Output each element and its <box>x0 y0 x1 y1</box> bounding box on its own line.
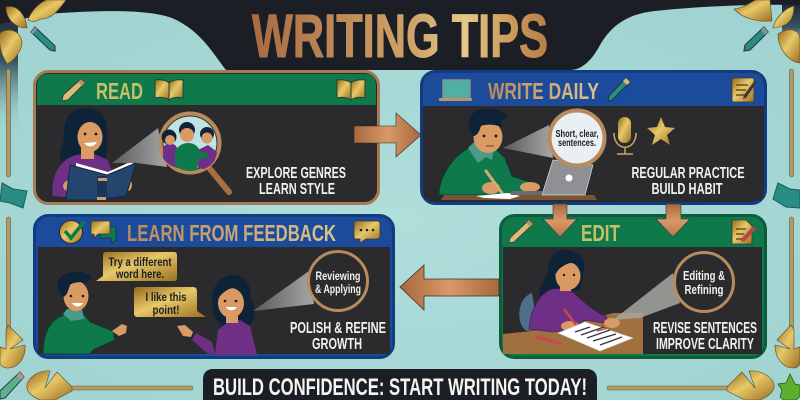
write daily heading: WRITE DAILY <box>488 78 599 104</box>
icon: green star <box>778 374 800 400</box>
woman reading <box>52 108 136 200</box>
read header <box>37 74 376 105</box>
dark corner shading left <box>0 0 18 135</box>
edit heading: EDIT <box>581 220 620 246</box>
write daily header <box>423 73 764 106</box>
magnifying glass <box>160 114 229 192</box>
callout beam <box>503 125 553 158</box>
callout: reviewing and applying: Reviewing <box>316 269 360 283</box>
speech bubble: try a different word: Try a different <box>108 257 172 269</box>
callout: reviewing and applying <box>308 252 368 310</box>
ornament: right leaves <box>734 0 800 63</box>
icon: chat bubble right <box>354 221 380 243</box>
icon: document with pen <box>732 220 756 244</box>
callout: short clear sentences: sentences. <box>558 137 596 149</box>
laptop <box>511 160 593 195</box>
edited paper <box>558 322 633 351</box>
icon: teal pencil top left <box>31 27 55 51</box>
panel: learn from feedback <box>34 216 394 358</box>
ornament: top left leaves <box>0 0 66 64</box>
speech bubble: i like this point <box>134 287 206 317</box>
arrow: edit to feedback <box>400 265 499 310</box>
ornament: right lower bar with leaf <box>775 217 800 368</box>
ornament: left upper bar <box>6 69 10 177</box>
arrow: read to write daily <box>354 113 421 157</box>
icon: microphone <box>614 117 636 154</box>
edit caption <box>653 320 757 353</box>
ornament: left lower bar with leaf <box>0 217 25 368</box>
body inset <box>424 106 763 199</box>
read card frame <box>34 72 378 204</box>
icon: bottom left pencil <box>0 372 24 399</box>
ornament: bottom left scroll <box>27 371 193 400</box>
icon: star <box>647 117 675 145</box>
icon: teal book left <box>0 183 27 208</box>
desk <box>503 313 643 354</box>
read heading: READ <box>96 78 143 104</box>
edit caption: IMPROVE CLARITY <box>656 336 754 353</box>
callout: short clear sentences <box>550 110 604 166</box>
panel: write daily <box>422 72 766 204</box>
beam <box>613 273 680 320</box>
read caption: LEARN STYLE <box>259 181 335 198</box>
icon: pen <box>608 78 630 101</box>
arrow: write daily to edit left <box>543 204 577 237</box>
write daily card frame <box>422 72 766 204</box>
edit card frame <box>500 216 766 358</box>
callout: editing and refining: Editing & <box>683 268 725 283</box>
read caption <box>246 165 346 198</box>
panel: edit <box>500 216 766 358</box>
icon: check badge <box>60 220 84 244</box>
ornament: right upper bar <box>790 69 794 177</box>
callout: short clear sentences: Short, clear, <box>556 128 599 140</box>
desk <box>441 195 597 200</box>
icon: pencil <box>62 79 85 101</box>
callout: editing and refining: Refining <box>684 282 724 297</box>
icon: open book right <box>337 80 365 100</box>
paper <box>476 193 520 199</box>
icon: laptop <box>439 80 472 101</box>
ornament: bottom right scroll <box>607 371 774 400</box>
icon: teal pencil top right <box>744 27 768 51</box>
feedback caption: GROWTH <box>312 336 362 353</box>
speech bubble: i like this point: I like this <box>146 292 186 304</box>
feedback caption <box>290 320 386 353</box>
red pencil <box>536 337 561 344</box>
bottom banner <box>203 369 597 400</box>
feedback caption: POLISH & REFINE <box>290 320 386 337</box>
icon: open book <box>155 80 183 100</box>
write daily caption <box>632 165 745 198</box>
callout beam <box>253 271 314 311</box>
speech bubble: i like this point: point! <box>152 305 180 317</box>
dark corner shading right <box>782 0 800 60</box>
man speaking <box>43 272 127 354</box>
feedback body <box>38 247 390 354</box>
title: WRITING TIPS <box>252 2 548 70</box>
callout: editing and refining <box>674 252 734 312</box>
title banner <box>0 0 800 70</box>
arrow: write daily to edit right <box>656 204 690 237</box>
icon: teal book right <box>773 183 800 208</box>
icon: pencil <box>509 220 533 243</box>
speech bubble: try a different word: word here. <box>115 269 164 281</box>
feedback heading: LEARN FROM FEEDBACK <box>127 220 336 246</box>
read caption: EXPLORE GENRES <box>246 165 346 182</box>
woman speaking <box>177 275 257 355</box>
write daily caption: REGULAR PRACTICE <box>632 165 745 182</box>
man writing <box>439 109 540 195</box>
woman editing <box>519 250 620 332</box>
edit body <box>503 247 762 354</box>
panel: read <box>34 72 378 204</box>
callout: reviewing and applying: & Applying <box>315 282 361 296</box>
icon: notebook <box>732 78 757 102</box>
icon: chat bubbles <box>91 221 116 243</box>
speech bubble: try a different word <box>96 252 177 281</box>
write daily caption: BUILD HABIT <box>652 181 723 198</box>
feedback card frame <box>34 216 394 358</box>
magnifier beam <box>112 128 167 167</box>
